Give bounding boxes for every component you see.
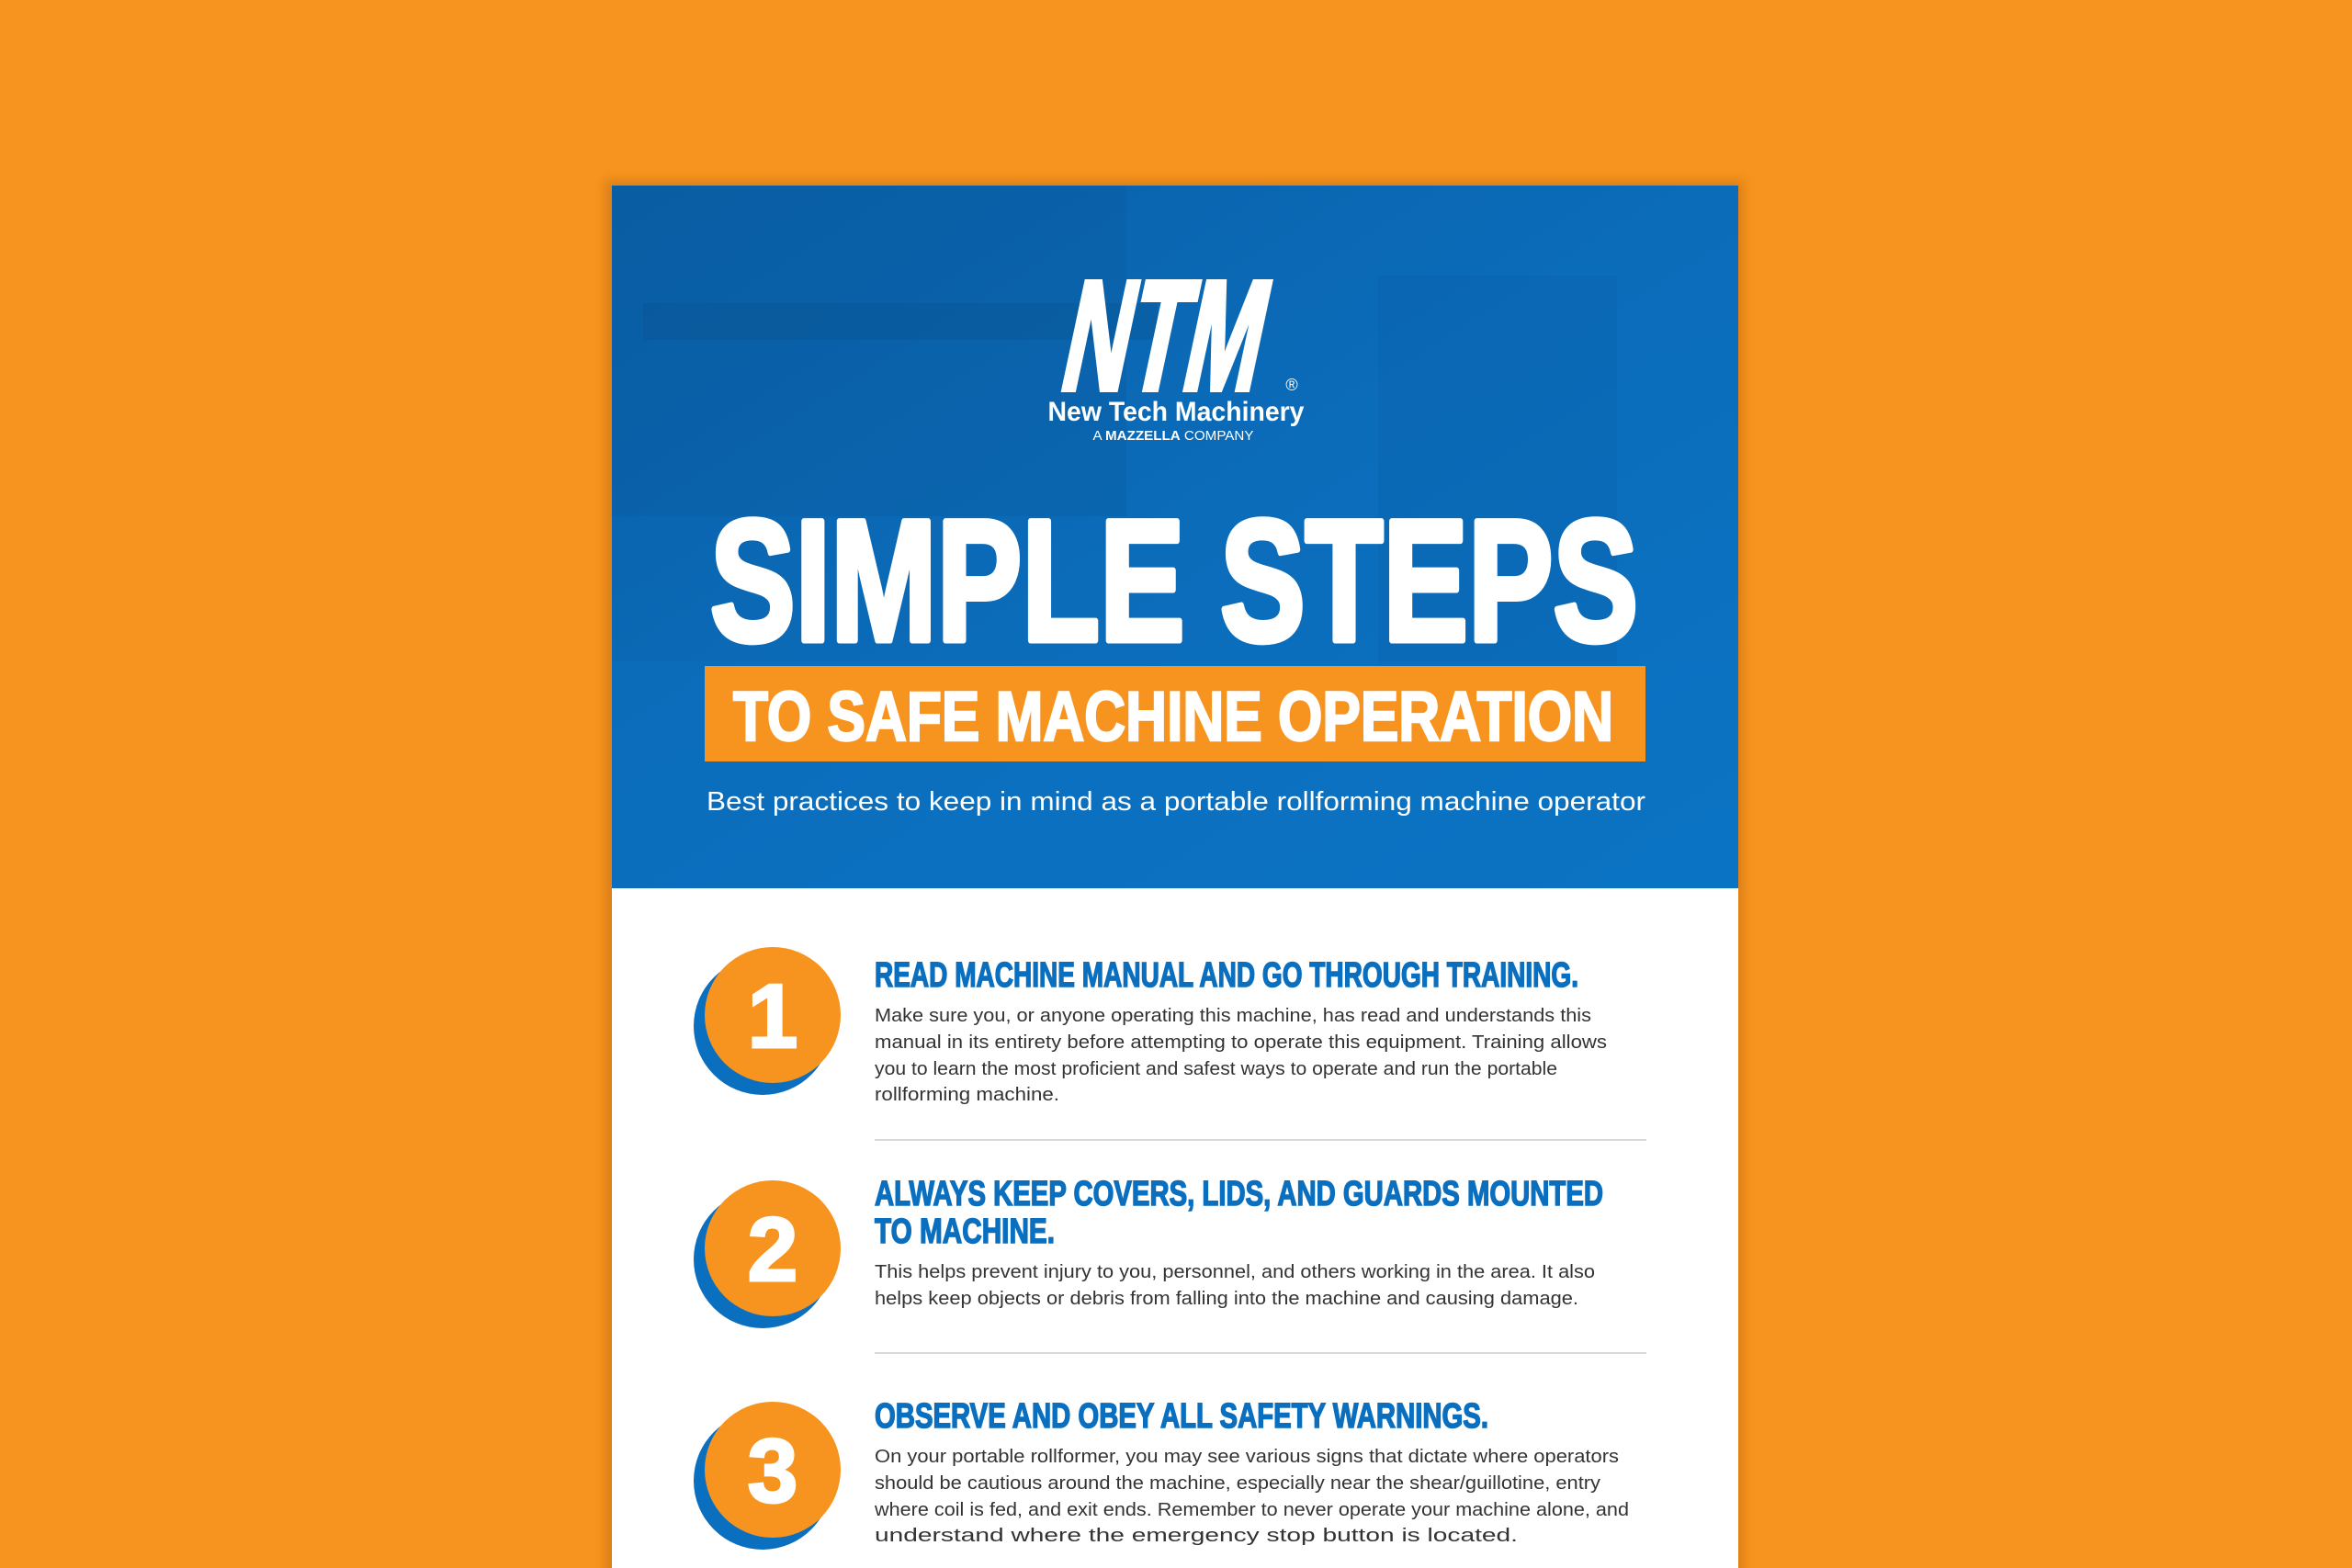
text block 2: helps keep objects or debris from falling into the machine and causing damage. (875, 1289, 1578, 1309)
subtitle banner (705, 666, 1645, 761)
paper shadow (605, 180, 1744, 1568)
panel: blue header (612, 186, 1738, 888)
logo: NTM: A MAZZELLA COMPANY (1093, 428, 1253, 444)
text block 2: This helps prevent injury to you, personnel, and others working in the area. It also (875, 1262, 1595, 1282)
step 3 (694, 1397, 1629, 1550)
text block 1: Make sure you, or anyone operating this machine, has read and understands this (875, 1006, 1591, 1026)
step 1 (694, 947, 1607, 1105)
heading 2 (875, 1175, 1603, 1251)
panel: paper (612, 186, 1738, 1568)
subtitle banner: TO SAFE MACHINE OPERATION (733, 678, 1613, 756)
icon: number 1 (694, 947, 841, 1095)
text block 3 (874, 1447, 1629, 1546)
heading 2: ALWAYS KEEP COVERS, LIDS, AND GUARDS MOUNTED (875, 1175, 1603, 1213)
heading 2: TO MACHINE. (875, 1213, 1055, 1251)
text block 3: should be cautious around the machine, especially near the shear/guillotine, entry (875, 1473, 1600, 1494)
tagline: Best practices to keep in mind as a portable rollforming machine operator (707, 787, 1645, 817)
text block 1: rollforming machine. (875, 1085, 1059, 1105)
text block 1: manual in its entirety before attempting to operate this equipment. Training allows (875, 1032, 1607, 1053)
heading 3: OBSERVE AND OBEY ALL SAFETY WARNINGS. (875, 1397, 1488, 1436)
icon: number 3 (694, 1402, 841, 1550)
title: SIMPLE STEPS (710, 484, 1638, 677)
icon: number 3: 3 (748, 1420, 797, 1521)
icon: number 1: 1 (748, 965, 797, 1066)
icon: number 2: 2 (748, 1199, 797, 1300)
logo: NTM: NTM (1050, 249, 1284, 423)
logo: NTM (1047, 249, 1305, 444)
text block 3: understand where the emergency stop button is located. (875, 1526, 1518, 1546)
logo: NTM: New Tech Machinery (1047, 397, 1305, 427)
text block 2 (875, 1262, 1595, 1309)
text block 3: where coil is fed, and exit ends. Remember to never operate your machine alone, and (874, 1500, 1629, 1520)
logo: NTM: ® (1285, 376, 1298, 394)
text block 1 (875, 1006, 1607, 1105)
icon: number 2 (694, 1180, 841, 1328)
text block 1: you to learn the most proficient and safest ways to operate and run the portable (875, 1059, 1557, 1079)
text block 3: On your portable rollformer, you may see various signs that dictate where operators (875, 1447, 1619, 1467)
step 2 (694, 1175, 1603, 1328)
heading 1: READ MACHINE MANUAL AND GO THROUGH TRAINING. (875, 956, 1578, 995)
